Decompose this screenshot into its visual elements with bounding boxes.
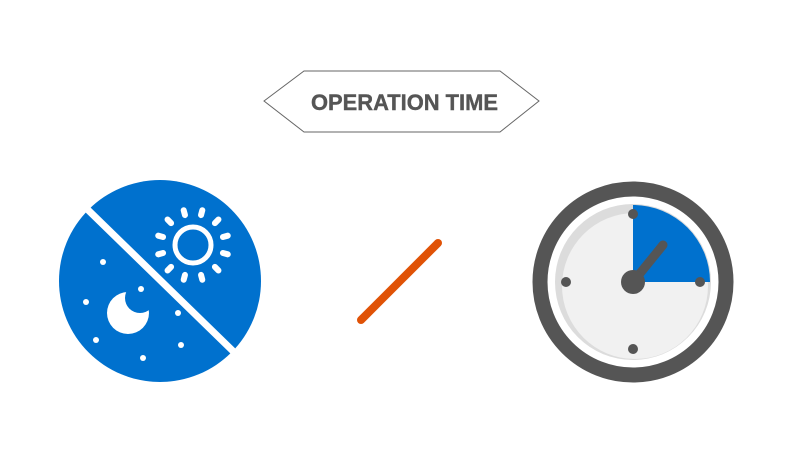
icon: day and night xyxy=(59,180,261,382)
icon: sun xyxy=(158,210,228,280)
title: OPERATION TIME xyxy=(311,90,498,115)
icon: clock xyxy=(540,189,726,375)
stars xyxy=(83,259,184,361)
separator slash xyxy=(361,243,438,320)
title xyxy=(264,71,539,132)
icon: moon xyxy=(107,292,149,334)
